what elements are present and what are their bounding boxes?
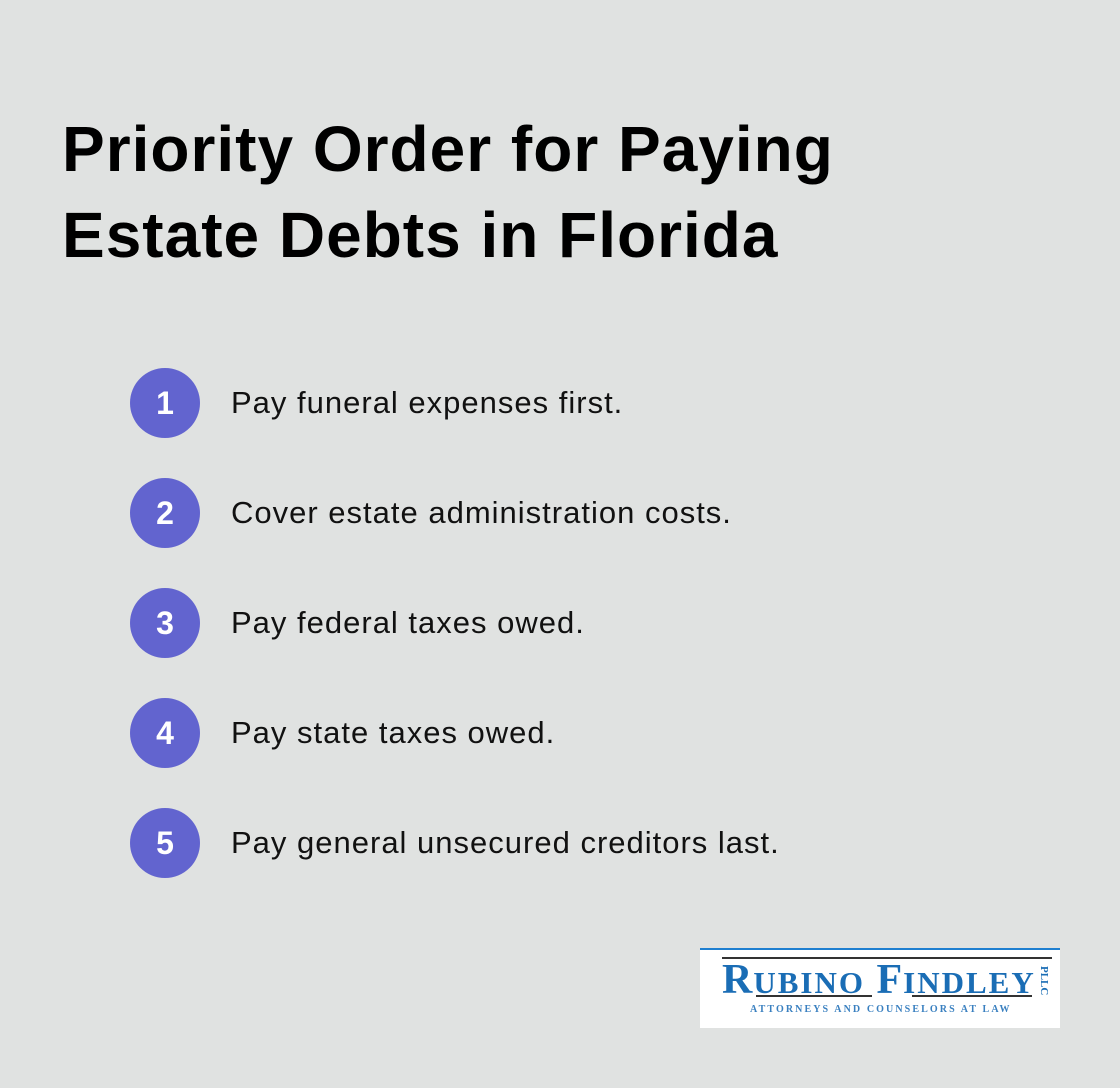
step 1: Pay funeral expenses first.: [231, 385, 623, 420]
title: Estate Debts in Florida: [62, 199, 778, 271]
step 3: Pay federal taxes owed.: [231, 605, 585, 640]
step 1: [130, 368, 623, 438]
step 4: [130, 698, 555, 768]
title: [62, 113, 834, 271]
logo: ATTORNEYS AND COUNSELORS AT LAW: [750, 1004, 1012, 1015]
logo: [700, 948, 1060, 1028]
logo: RUBINO FINDLEY: [722, 957, 1036, 1003]
title: Priority Order for Paying: [62, 113, 834, 185]
step 4: Pay state taxes owed.: [231, 715, 555, 750]
step 3: [130, 588, 585, 658]
step 1: 1: [156, 385, 174, 421]
step 3: 3: [156, 605, 174, 641]
step 2: 2: [156, 495, 174, 531]
step 5: [130, 808, 780, 878]
step 5: Pay general unsecured creditors last.: [231, 825, 780, 860]
logo: PLLC: [1038, 966, 1050, 995]
step 2: Cover estate administration costs.: [231, 495, 732, 530]
step 5: 5: [156, 825, 174, 861]
step 4: 4: [156, 715, 174, 751]
step 2: [130, 478, 732, 548]
